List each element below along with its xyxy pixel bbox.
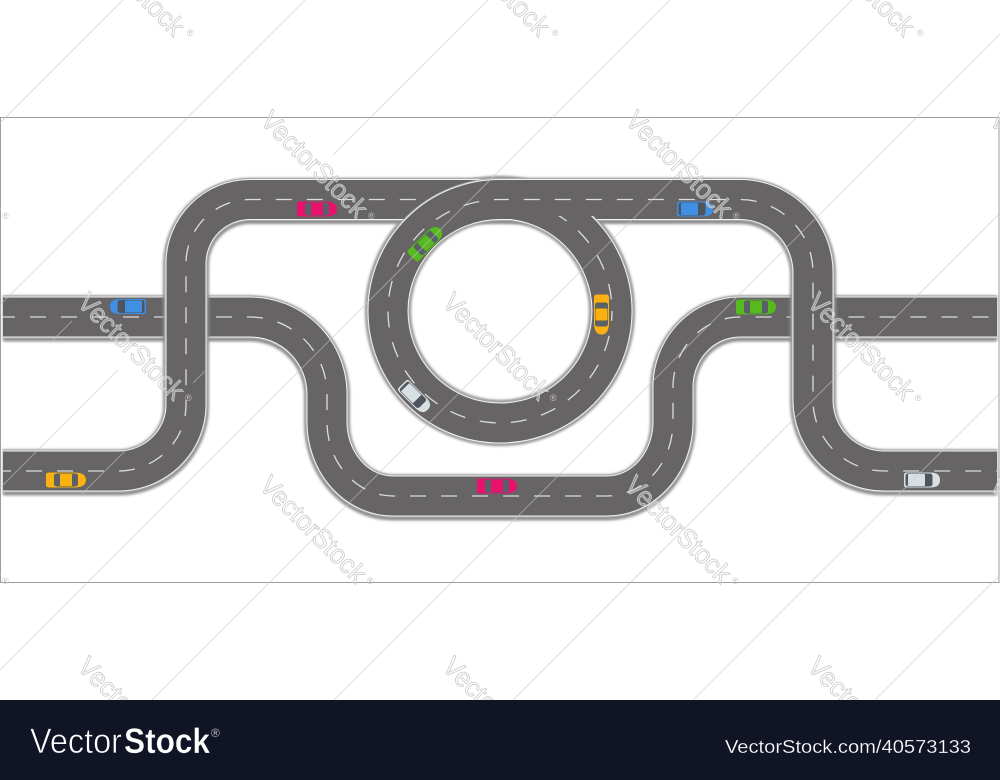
- watermark text tiles: VectorStock: [619, 470, 738, 589]
- footer logo: ®: [211, 726, 220, 740]
- watermark text tiles: ®: [552, 28, 559, 38]
- watermark text tiles: VectorStock: [255, 105, 374, 224]
- frame: [0, 118, 999, 582]
- footer bar: [0, 700, 1000, 780]
- watermark text tiles: VectorStock: [254, 470, 373, 589]
- watermark text tiles: VectorStock: [437, 287, 556, 406]
- road: upper road from lower left to lower right: [3, 199, 997, 472]
- car: green, on loop: [407, 224, 445, 262]
- watermark text tiles: ®: [2, 211, 9, 221]
- footer logo: Stock: [124, 722, 210, 761]
- watermark text tiles: VectorStock: [620, 105, 739, 224]
- car: yellow, on loop: [594, 294, 609, 334]
- watermark text tiles: VectorStock: [72, 287, 191, 406]
- footer image id: VectorStock.com/40573133: [725, 737, 971, 757]
- watermark text tiles: ®: [550, 393, 557, 403]
- watermark text tiles: ®: [733, 211, 740, 221]
- car: yellow, lower left road: [46, 472, 86, 488]
- road: loop merging out from under the upper road: [512, 216, 624, 266]
- car: white, lower right road: [904, 472, 940, 488]
- watermark text tiles: VectorStock: [802, 287, 921, 406]
- footer logo: Vector: [30, 722, 122, 761]
- car: pink, upper road: [297, 202, 337, 216]
- watermark text tiles: VectorStock: [72, 651, 191, 770]
- car: green, right road: [736, 300, 776, 314]
- car: white, on loop: [397, 379, 433, 415]
- car: blue, left road: [110, 299, 146, 314]
- car: blue, upper right road: [677, 202, 713, 216]
- watermark text tiles: ®: [915, 393, 922, 403]
- road: middle winding road: [3, 317, 997, 498]
- road: full circular loop: [388, 199, 612, 423]
- watermark text tiles: ®: [732, 576, 739, 586]
- watermark text tiles: VectorStock: [437, 651, 556, 770]
- road: left half of loop over the upper road: [388, 200, 500, 423]
- watermark text tiles: ®: [367, 576, 374, 586]
- cars: [46, 202, 940, 494]
- car: pink, bottom road: [477, 478, 517, 494]
- watermark text tiles: VectorStock: [802, 651, 921, 770]
- watermark text tiles: ®: [917, 28, 924, 38]
- watermark text tiles: ®: [2, 576, 9, 586]
- watermark text tiles: ®: [368, 211, 375, 221]
- watermark text tiles: ®: [185, 393, 192, 403]
- watermark text tiles: ®: [187, 28, 194, 38]
- footer logo: [30, 722, 220, 761]
